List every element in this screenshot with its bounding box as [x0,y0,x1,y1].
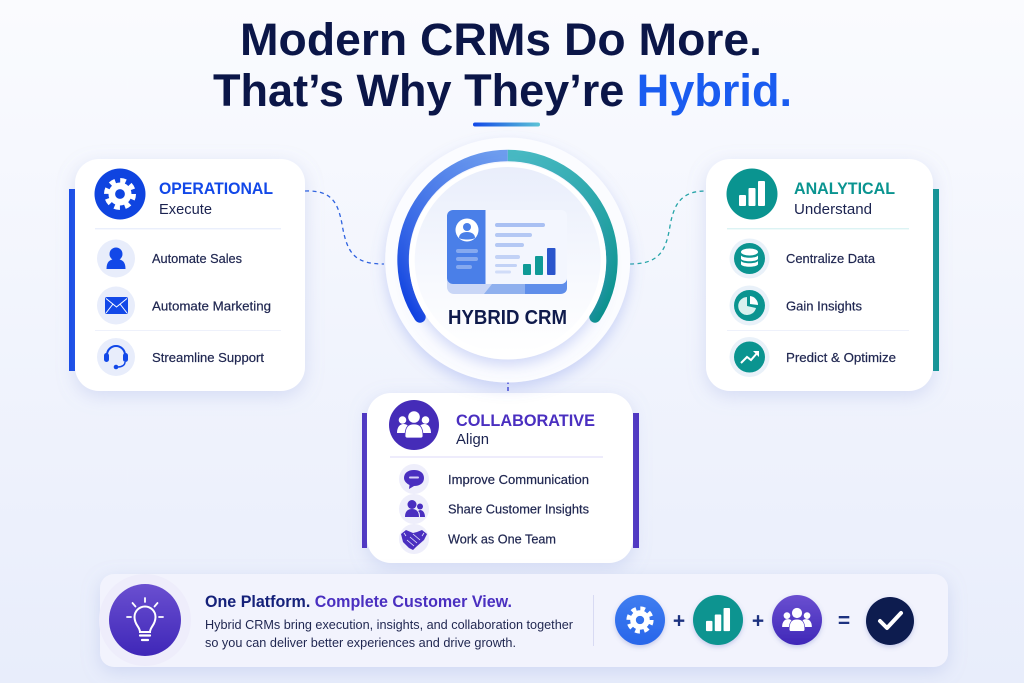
icon: collaborative [772,595,822,645]
item: gain insights [730,286,862,326]
card [367,393,633,563]
banner body [205,617,574,650]
icon: check [866,597,914,645]
title [213,14,792,116]
icon: analytical [693,595,743,645]
equals: = [838,610,850,632]
accent bar [933,189,939,371]
subheading: Understand [794,202,872,218]
panel: collaborative [362,393,639,563]
banner background [100,574,948,667]
subheading: Align [456,432,489,448]
item: centralize data [730,238,875,278]
icon: gear [94,168,146,220]
title: Modern CRMs Do More. [240,14,762,65]
item: automate marketing [97,286,271,324]
item: share customer insights: Share Customer Insights [448,502,589,516]
item: automate sales [97,240,242,278]
icon: team [389,400,439,450]
item: share customer insights [399,494,589,524]
progress ring [403,155,612,323]
heading: COLLABORATIVE [456,411,595,430]
connector: analytical to hub [630,191,706,264]
panel: operational [69,159,305,391]
subheading: Execute [159,202,212,218]
item: automate sales: Automate Sales [152,252,242,266]
panel: summary banner [99,574,948,667]
icon: operational [615,595,665,645]
item: improve communication [399,464,589,494]
item: predict and optimize: Predict & Optimize [786,351,896,365]
connector: operational to hub [305,191,384,264]
hub: hybrid crm [385,138,630,382]
item: centralize data: Centralize Data [786,252,875,266]
title underline [473,122,540,126]
accent bar [69,189,75,371]
inner disc [409,162,606,360]
outer halo [385,138,630,382]
banner body: so you can deliver better experiences and drive growth. [205,635,516,650]
item: predict and optimize [730,337,896,377]
item: streamline support [97,338,265,376]
card [75,159,305,391]
heading: ANALYTICAL [794,179,895,198]
panel: analytical [706,159,939,391]
accent bars [362,413,639,548]
item: gain insights: Gain Insights [786,300,862,314]
monitor illustration [447,210,567,294]
plus: + [673,610,685,632]
title: That’s Why They’re Hybrid. [213,65,792,116]
item: improve communication: Improve Communication [448,473,589,487]
connector: hub to collaborative [507,380,509,393]
item: streamline support: Streamline Support [152,351,265,365]
card [706,159,933,391]
item: work as one team [399,524,556,554]
banner body: Hybrid CRMs bring execution, insights, and collaboration together [205,617,574,632]
plus: + [752,610,764,632]
item: automate marketing: Automate Marketing [152,300,271,314]
equation [615,595,914,645]
hub label: HYBRID CRM [448,307,567,329]
icon: bars [726,168,778,220]
heading: OPERATIONAL [159,179,273,198]
item: work as one team: Work as One Team [448,532,556,546]
banner heading: One Platform. Complete Customer View. [205,593,512,611]
icon: light bulb [99,574,191,666]
